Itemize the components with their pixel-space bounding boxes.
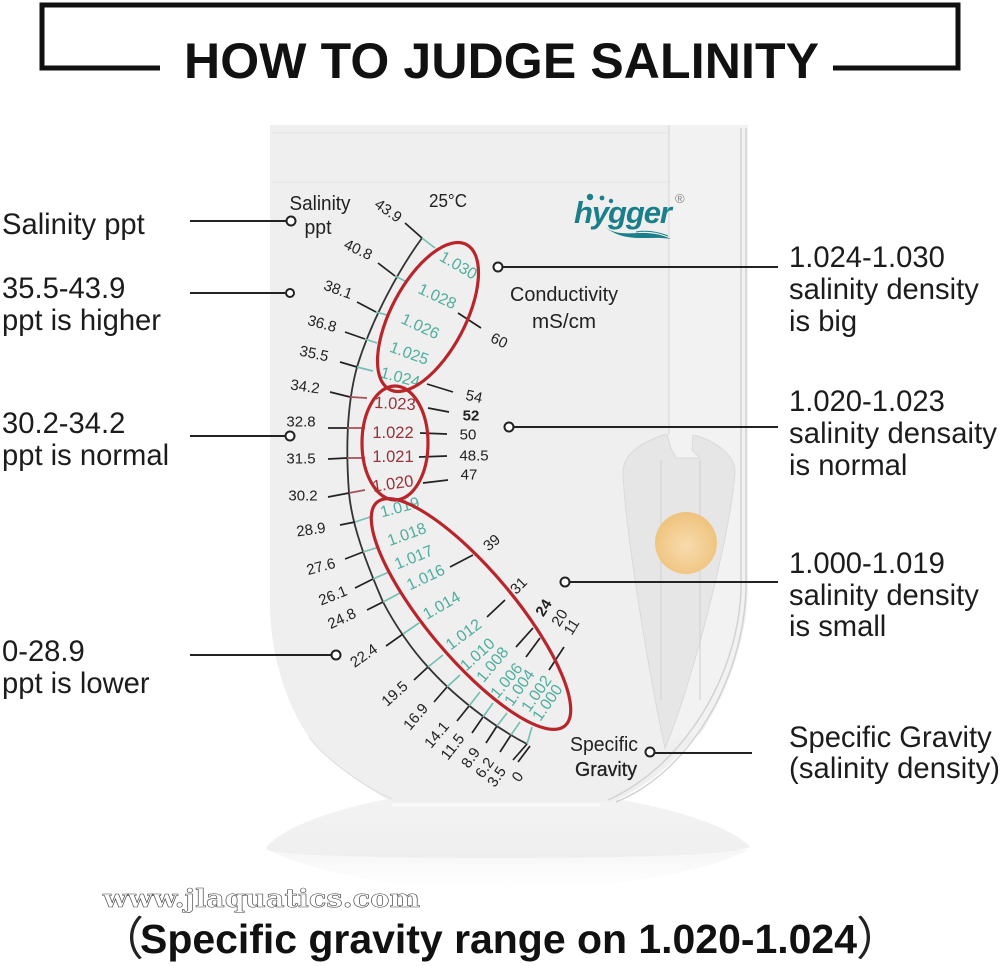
specific gravity high values: 1.026 [398,311,442,343]
title frame [42,5,958,68]
range note: （ [98,913,144,965]
conductivity ticks and numbers: 47 [461,466,477,484]
specific gravity low values: 1.014 [420,589,464,623]
small scale captions: Conductivity [510,284,618,306]
watermark: www.jlaquatics.com [102,884,420,913]
salinity ppt numbers: 36.8 [306,312,338,336]
right callout: specific gravity: (salinity density) [789,753,1000,785]
specific gravity high values [378,249,480,391]
salinity ppt numbers: 27.6 [305,555,337,579]
specific gravity low values: 1.008 [474,644,512,686]
right callout: small: 1.000-1.019 [789,548,945,580]
salinity ppt numbers: 19.5 [378,678,412,710]
specific gravity high values: 1.024 [378,365,422,391]
conductivity ticks and numbers: 48.5 [459,448,489,464]
conductivity ticks and numbers: 52 [463,408,479,424]
conductivity ticks and numbers: 20 [548,606,572,630]
range note: ） [856,913,902,965]
right callout: normal: 1.020-1.023 [789,386,945,418]
specific gravity low values: 1.019 [378,495,422,521]
right callout: big: is big [789,306,857,338]
salinity ppt numbers: 32.8 [286,414,316,430]
right callout: normal: is normal [789,450,907,482]
right callout: big: salinity density [789,274,979,306]
small scale captions: mS/cm [532,311,596,333]
conductivity ticks and numbers: 54 [464,387,484,407]
conductivity ticks and numbers: 50 [460,426,476,444]
small scale captions [290,191,638,781]
salinity ppt numbers: 38.1 [321,277,355,303]
specific gravity low values: 1.002 [519,673,556,715]
conductivity ticks and numbers: 60 [488,330,510,352]
orange float disc [655,512,717,574]
conductivity ticks and numbers: 39 [480,531,504,555]
conductivity ticks and numbers [419,313,583,670]
right callout: specific gravity [646,722,1000,785]
logo: hygger [574,191,685,239]
salinity ppt numbers: 22.4 [347,641,381,671]
specific gravity low values [378,495,567,724]
left callout: normal: 30.2-34.2 [2,408,125,440]
specific gravity low values: 1.012 [443,616,485,654]
conductivity ticks and numbers: 31 [507,574,531,598]
right callout: normal: salinity densaity [789,418,997,450]
salinity ppt numbers: 26.1 [316,583,350,609]
salinity ppt numbers: 24.8 [325,605,359,633]
specific gravity low values: 1.016 [404,562,448,594]
salinity ppt numbers: 8.9 [458,745,484,771]
specific gravity normal values [371,394,416,496]
salinity ppt numbers: 16.9 [400,700,432,734]
conductivity ticks and numbers: 11 [561,616,583,638]
salinity ppt numbers: 35.5 [298,343,330,365]
salinity ppt numbers [286,196,527,790]
specific gravity low values: 1.006 [488,660,526,702]
outer black ticks [328,223,530,762]
logo: hygger: hygger [574,195,674,230]
specific gravity low values: 1.004 [502,667,539,709]
right callout: small [560,548,979,643]
left callout: normal [2,408,294,472]
left callout: lower: 0-28.9 [2,636,85,668]
salinity ppt numbers: 28.9 [295,520,327,540]
left callout: Salinity ppt: Salinity ppt [2,209,145,241]
left callout: Salinity ppt [2,209,296,241]
specific gravity low values: 1.018 [385,520,429,550]
scale arc [347,238,527,744]
conductivity ticks and numbers: 24 [532,596,556,620]
salinity ppt numbers: 34.2 [289,377,321,397]
salinity ppt numbers: 31.5 [286,450,316,468]
salinity ppt numbers: 6.2 [472,755,498,781]
specific gravity normal values: 1.021 [372,448,414,466]
teal inner ticks [355,238,532,744]
curved salinity scale [328,223,532,762]
specific gravity high values: 1.025 [387,339,431,369]
small scale captions: Specific [570,734,638,756]
specific gravity normal values: 1.022 [372,424,414,442]
salinity ppt numbers: 43.9 [371,196,405,226]
base of the hydrometer [267,798,750,890]
logo: hygger: ® [675,191,685,206]
specific gravity normal values: 1.020 [371,472,415,496]
small scale captions: Gravity [575,759,637,781]
specific gravity high values: 1.030 [436,249,480,283]
salinity ppt numbers: 3.5 [484,764,510,790]
red ellipse: high density [357,227,499,407]
specific gravity normal values: 1.023 [374,394,416,414]
salinity ppt numbers: 11.5 [438,731,468,763]
left callout: lower: ppt is lower [2,668,150,700]
red ellipse: normal density [362,386,428,500]
red inner ticks [347,397,367,493]
red ellipse: low density [343,474,599,754]
left callout: normal: ppt is normal [2,440,169,472]
range note: Specific gravity range on 1.020-1.024 [140,916,857,962]
small scale captions: 25°C [429,191,467,211]
salinity ppt numbers: 0 [509,769,527,785]
salinity ppt numbers: 30.2 [288,488,318,504]
pointer float [623,434,735,748]
hydrometer body panel [270,125,748,802]
right callout: big [494,242,979,338]
left callout: higher [2,273,294,337]
small scale captions: Salinity [290,193,350,215]
right callout: normal [504,386,997,482]
left callout: higher: ppt is higher [2,305,161,337]
title: HOW TO JUDGE SALINITY [184,33,819,89]
specific gravity high values: 1.028 [415,281,459,313]
right callout: specific gravity: Specific Gravity [789,722,992,754]
salinity ppt numbers: 14.1 [421,718,453,752]
specific gravity low values: 1.000 [530,682,567,724]
right callout: small: salinity density [789,580,979,612]
small scale captions: ppt [304,217,332,239]
right callout: small: is small [789,611,886,643]
specific gravity low values: 1.010 [457,635,499,675]
specific gravity low values: 1.017 [392,543,436,573]
left callout: lower [2,636,340,700]
salinity ppt numbers: 40.8 [341,236,375,264]
left callout: higher: 35.5-43.9 [2,273,125,305]
right callout: big: 1.024-1.030 [789,242,945,274]
